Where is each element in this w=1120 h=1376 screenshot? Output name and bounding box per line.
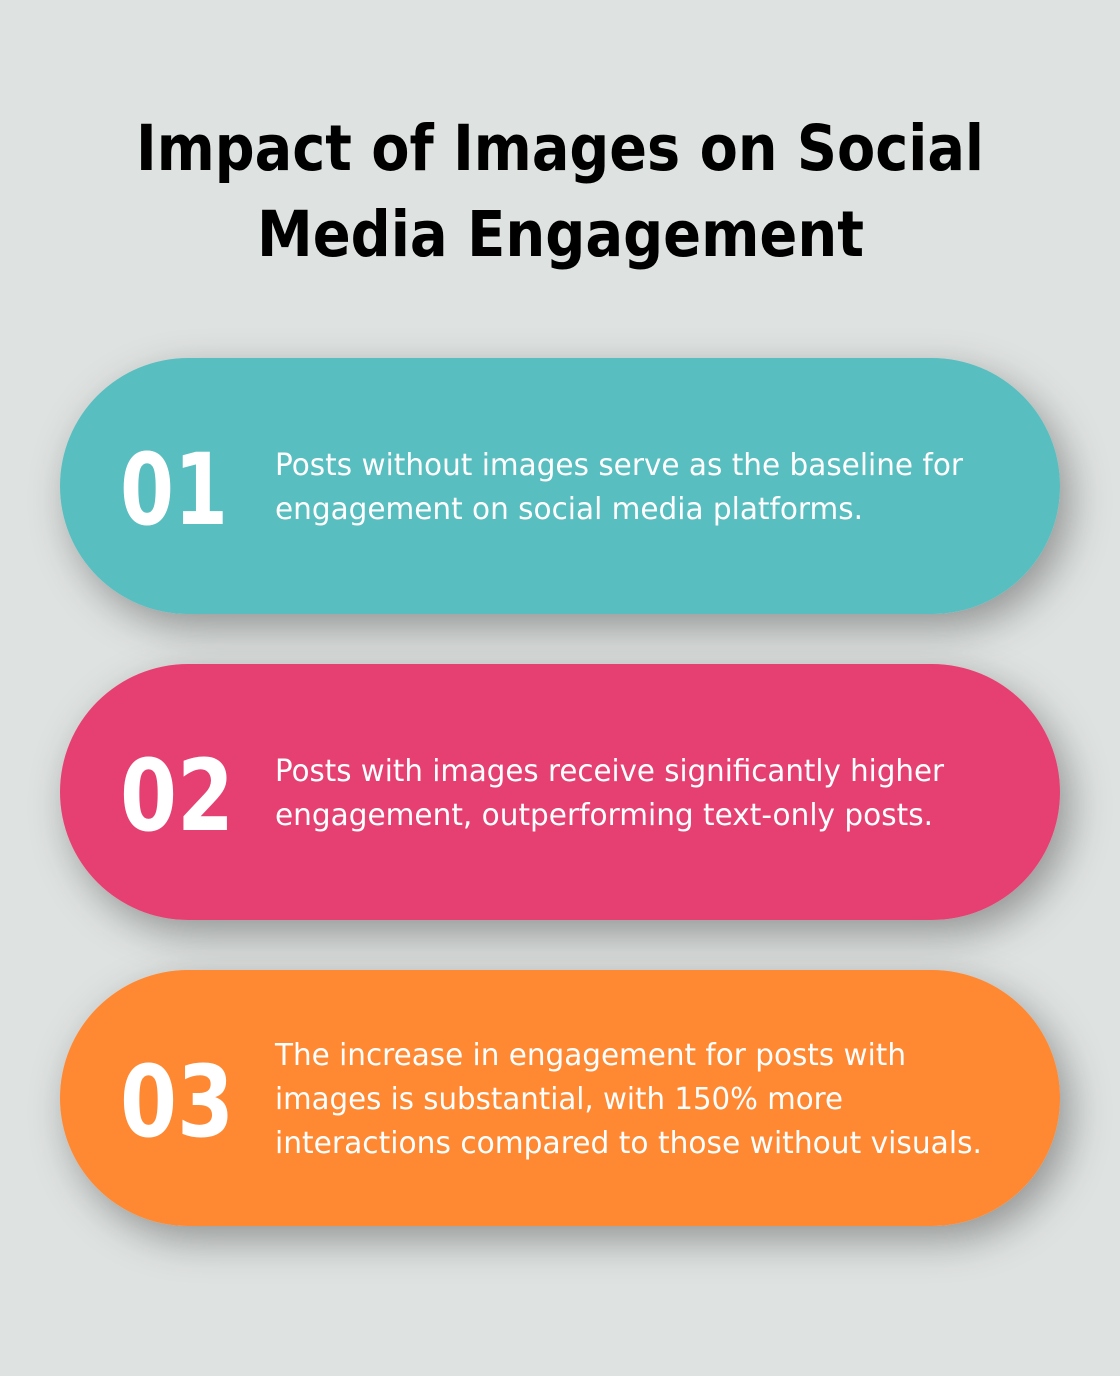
step 01 description	[275, 448, 964, 527]
panel: step 01	[60, 358, 1060, 614]
teal pill	[60, 358, 1060, 614]
step 01 description: Posts without images serve as the baseline for	[275, 448, 964, 483]
number 01: 01	[120, 433, 228, 548]
step 02 description: Posts with images receive significantly higher	[275, 754, 945, 789]
number 02: 02	[120, 739, 234, 854]
step 01 description: engagement on social media platforms.	[275, 492, 863, 527]
step 02 description	[275, 754, 945, 833]
pink pill	[60, 664, 1060, 920]
step 03 description: interactions compared to those without visuals.	[275, 1126, 982, 1161]
title	[136, 112, 984, 271]
step 03 description	[274, 1038, 982, 1161]
step 03 description: The increase in engagement for posts with	[274, 1038, 906, 1073]
title: Media Engagement	[257, 198, 864, 271]
step 02 description: engagement, outperforming text-only posts.	[275, 798, 933, 833]
step 03 description: images is substantial, with 150% more	[275, 1082, 843, 1117]
orange pill	[60, 970, 1060, 1226]
panel: step 02	[60, 664, 1060, 920]
title: Impact of Images on Social	[136, 112, 984, 185]
panel: step 03	[60, 970, 1060, 1226]
number 03: 03	[120, 1045, 234, 1160]
